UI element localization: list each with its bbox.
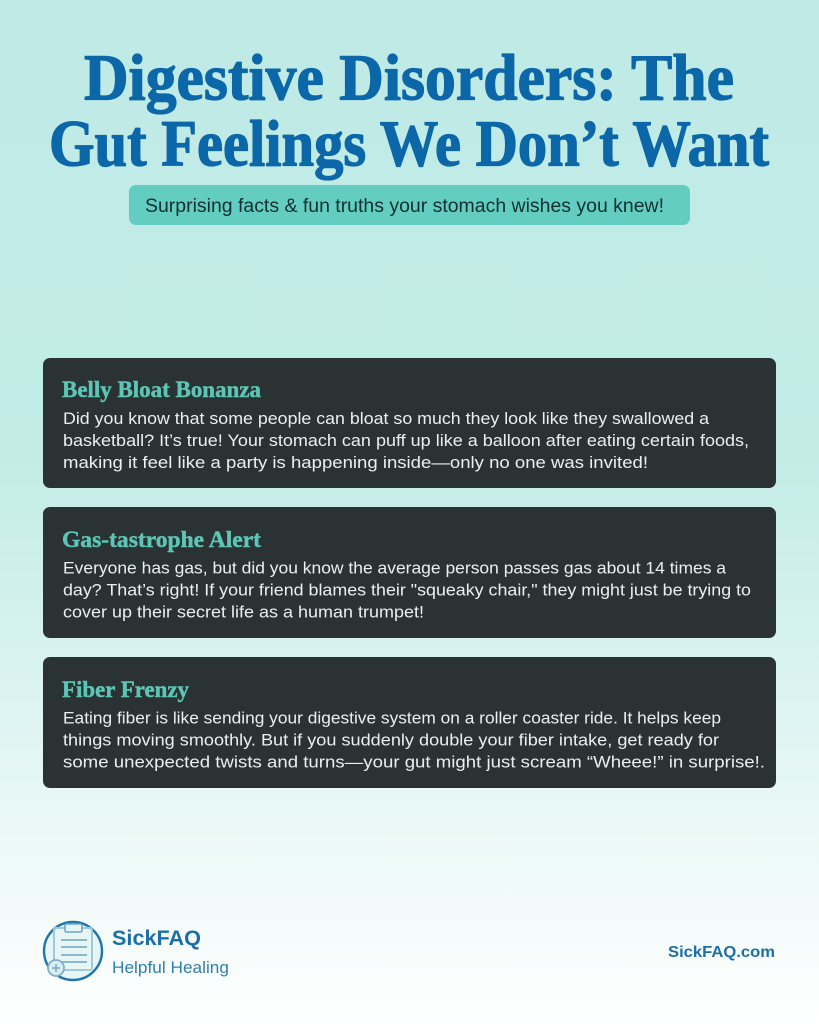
text: Belly Bloat Bonanza body: basketball? It’s true! Your stomach can puff up like a balloon after eating certain foods, [63,431,749,450]
heading: Belly Bloat Bonanza: Belly Bloat Bonanza [62,377,261,402]
website url: SickFAQ.com [668,944,775,961]
text: Belly Bloat Bonanza body: Did you know that some people can bloat so much they look like they swallowed a [63,409,710,428]
text: Gas-tastrophe Alert body [63,558,751,622]
text: Fiber Frenzy body: Eating fiber is like sending your digestive system on a roller coaster ride. It helps keep [63,708,721,728]
text: Belly Bloat Bonanza body: making it feel like a party is happening inside—only no one was invited! [63,453,648,472]
title [49,42,769,180]
title: Digestive Disorders: The [84,42,734,114]
text: Fiber Frenzy body [63,708,765,772]
text: Gas-tastrophe Alert body: cover up their secret life as a human trumpet! [63,602,424,622]
icon: clipboard logo [44,922,102,980]
text: Gas-tastrophe Alert body: Everyone has gas, but did you know the average person passes gas about 14 times a [63,558,727,578]
brand tagline: Helpful Healing [112,958,229,977]
panel: Gas-tastrophe Alert [43,507,776,638]
text: Belly Bloat Bonanza body [63,409,749,472]
panel: Fiber Frenzy [43,657,776,788]
brand name: SickFAQ [112,927,201,950]
heading: Fiber Frenzy: Fiber Frenzy [62,677,189,702]
text: Gas-tastrophe Alert body: day? That’s right! If your friend blames their "squeaky chair," they might just be trying to [63,580,751,600]
heading: Gas-tastrophe Alert: Gas-tastrophe Alert [62,527,261,552]
text: Fiber Frenzy body: some unexpected twists and turns—your gut might just scream “Wheee!” in surprise!. [63,752,765,772]
subtitle banner: Surprising facts & fun truths your stomach wishes you knew! [145,196,664,217]
panel: Belly Bloat Bonanza [43,358,776,488]
text: Fiber Frenzy body: things moving smoothly. But if you suddenly double your fiber intake, get ready for [63,730,719,750]
subtitle banner [129,185,690,225]
